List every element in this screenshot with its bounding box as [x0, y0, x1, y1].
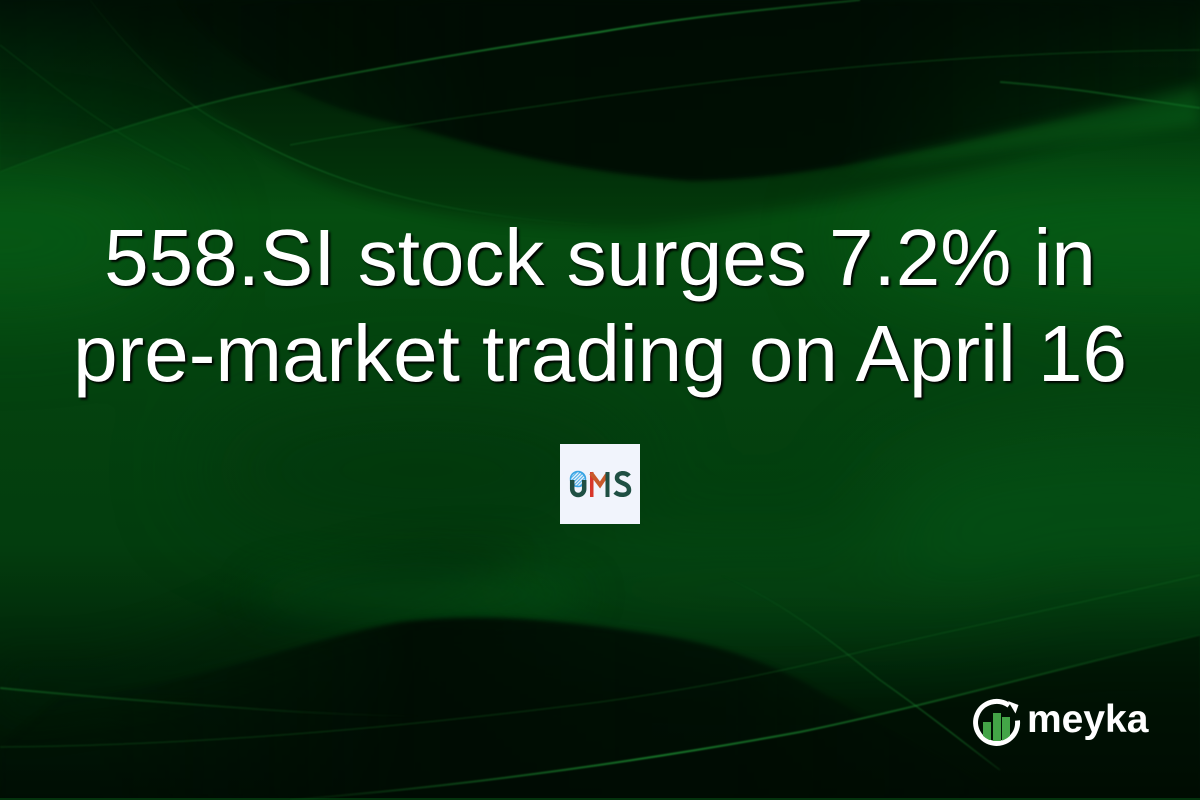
- icon: UMS company logo: [560, 444, 640, 524]
- wordmark: meyka: [1027, 698, 1148, 741]
- top: left soft shade: [95, 0, 1200, 228]
- soft glows and centre shading: [0, 170, 1200, 624]
- bright streak upper right: [840, 85, 1200, 168]
- title: 558.SI stock surges 7.2% in: [104, 213, 1096, 302]
- icon: meyka circular arrow with bars: [973, 698, 1020, 746]
- lower wedge: [290, 635, 1200, 800]
- top: upper dark band: [0, 0, 860, 172]
- bottom: soft dark band left: [0, 552, 540, 720]
- logo: meyka: [973, 698, 1149, 746]
- title: pre-market trading on April 16: [73, 309, 1127, 398]
- bottom: faint glow behind wave: [250, 571, 590, 619]
- bottom: main dark wave: [0, 617, 1010, 800]
- letter S: [615, 473, 629, 495]
- top: main dark wave: [180, 0, 1200, 181]
- title: [73, 213, 1127, 401]
